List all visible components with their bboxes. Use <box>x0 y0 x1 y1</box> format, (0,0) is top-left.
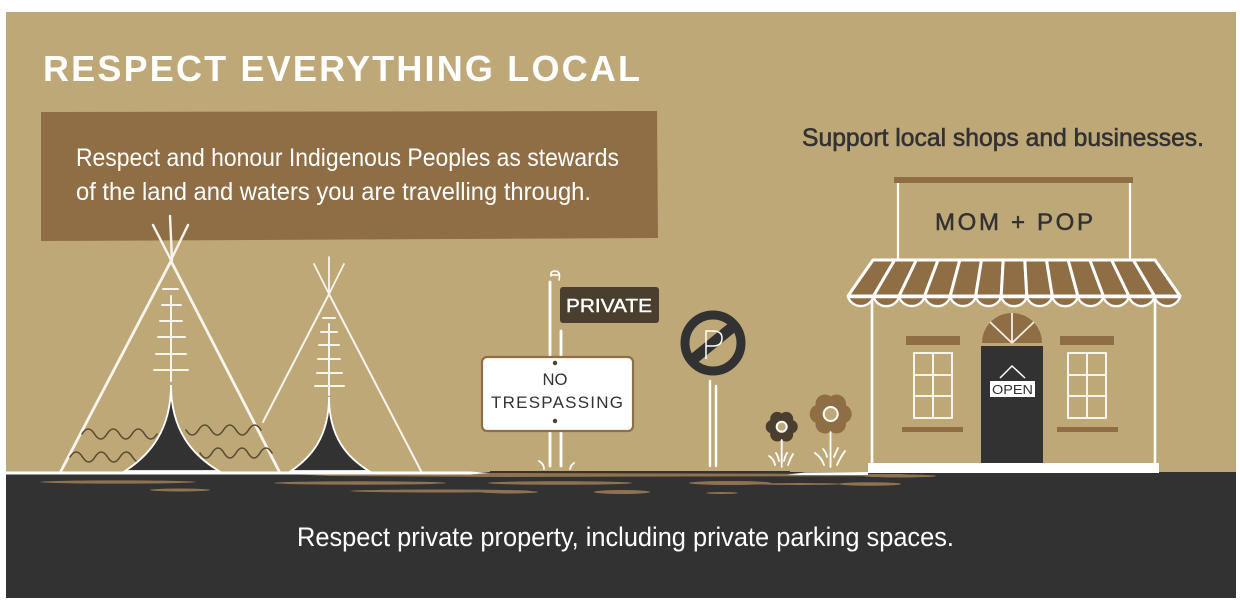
building: mom and pop shop <box>848 177 1180 473</box>
shop sign <box>894 177 1133 259</box>
awning scallops <box>848 297 1180 306</box>
text: respect private property: Respect private property, including private parking spaces. <box>297 522 954 552</box>
walls <box>872 298 1155 464</box>
sign: private and no trespassing: NO <box>542 370 568 389</box>
sign: private and no trespassing: TRESPASSING <box>491 393 623 412</box>
icon: dark flower <box>766 412 798 467</box>
right window <box>1057 336 1118 432</box>
icon: small tipi <box>263 257 421 471</box>
icon: brown flower <box>810 394 852 467</box>
awning stripes <box>848 260 1180 296</box>
shop sign: MOM + POP <box>935 209 1093 236</box>
fanlight <box>982 313 1042 343</box>
title: RESPECT EVERYTHING LOCAL <box>43 48 640 89</box>
sign: no parking <box>685 315 741 466</box>
icon: large tipi <box>61 216 279 471</box>
door <box>981 346 1043 463</box>
panel: indigenous peoples message: of the land and waters you are travelling through. <box>76 178 591 206</box>
sign: private and no trespassing: PRIVATE <box>566 296 652 316</box>
panel: indigenous peoples message: Respect and honour Indigenous Peoples as stewards <box>76 144 619 172</box>
text: support local shops: Support local shops and businesses. <box>802 124 1204 152</box>
sign: private and no trespassing <box>482 271 659 469</box>
open sign: OPEN <box>992 382 1033 397</box>
left window <box>902 336 963 432</box>
ground line <box>6 471 868 475</box>
open sign <box>990 366 1035 397</box>
panel: dark ground <box>6 472 1236 598</box>
panel: indigenous peoples message <box>41 111 658 241</box>
shop base <box>868 463 1159 473</box>
